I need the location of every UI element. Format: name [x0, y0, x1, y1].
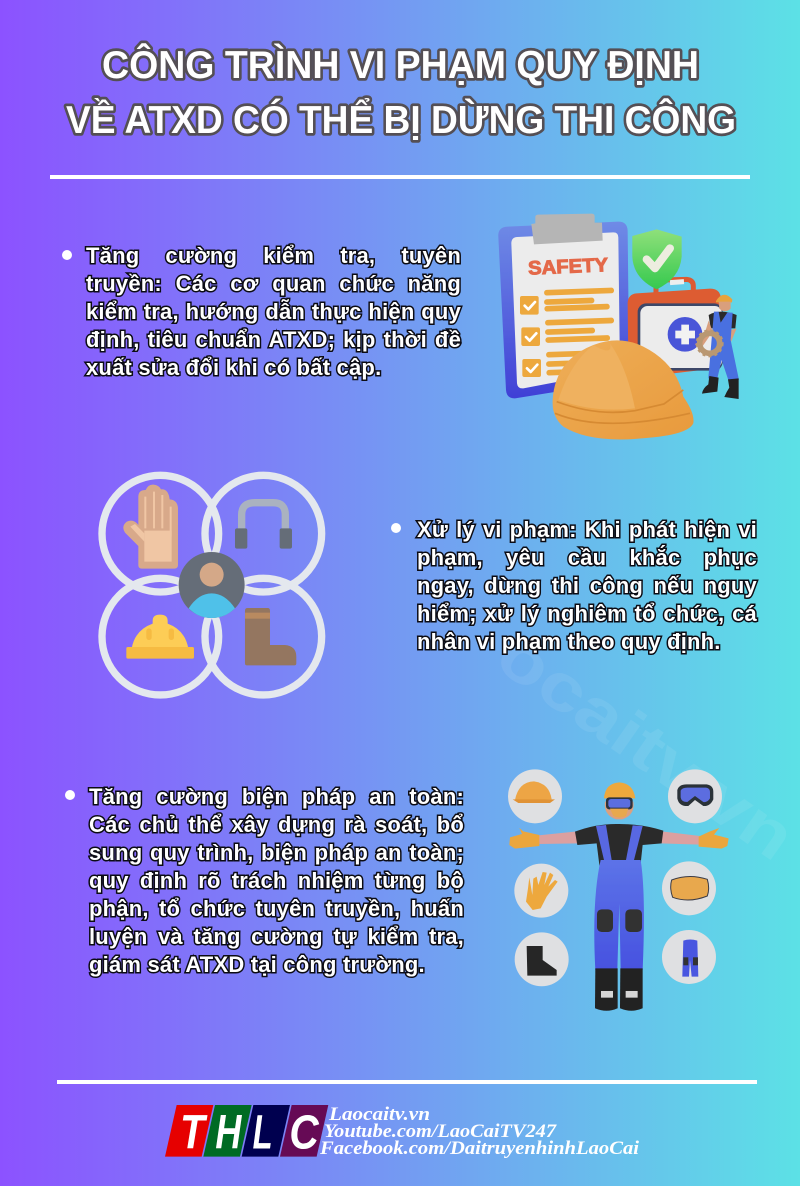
disc: mask — [671, 876, 709, 900]
icon: boot — [245, 608, 296, 665]
text block: xử lý vi phạm: ngay, dừng thi công nếu nguy — [417, 573, 757, 598]
disc: helmet — [513, 781, 555, 803]
title: CÔNG TRÌNH VI PHẠM QUY ĐỊNH — [102, 42, 699, 87]
disc: goggles — [677, 784, 713, 806]
text block: tăng cường biện pháp an toàn: quy định rõ trách nhiệm từng bộ — [89, 868, 464, 893]
footer links: Laocaitv.vn — [328, 1104, 430, 1125]
icon: person — [179, 552, 245, 618]
text block: xử lý vi phạm — [391, 517, 759, 655]
text block: xử lý vi phạm: hiểm; xử lý nghiêm tổ chức, cá — [417, 601, 757, 626]
text block: xử lý vi phạm: phạm, yêu cầu khắc phục — [417, 545, 757, 570]
footer links: Youtube.com/LaoCaiTV247 — [324, 1121, 558, 1142]
title — [64, 40, 736, 143]
text block: tăng cường kiểm tra — [62, 243, 463, 381]
illustration: safety clipboard, helmet and first-aid kit — [498, 214, 739, 440]
overalls — [594, 825, 644, 970]
logo tile T: T — [180, 1106, 208, 1160]
logo tile H: H — [215, 1106, 242, 1160]
text block: tăng cường biện pháp an toàn: luyện và tăng cường tự kiểm tra, — [89, 924, 464, 949]
logo tile C: C — [289, 1106, 320, 1160]
text block: tăng cường biện pháp an toàn: phận, tổ chức tuyên truyền, huấn — [89, 896, 464, 921]
text block: tăng cường kiểm tra: xuất sửa đổi khi có bất cập. — [86, 355, 381, 380]
head — [604, 782, 635, 819]
text block: tăng cường kiểm tra: định, tiêu chuẩn ATXD; kịp thời đề — [86, 327, 461, 352]
torso — [575, 824, 663, 870]
hard hat — [553, 340, 694, 439]
icon: yellow hard hat — [126, 615, 194, 659]
text block: tăng cường biện pháp an toàn: Tăng cường biện pháp an toàn: — [89, 784, 464, 809]
first-aid kit — [628, 279, 723, 373]
text block: xử lý vi phạm: Xử lý vi phạm: Khi phát hiện vi — [417, 517, 757, 542]
disc: boot — [527, 946, 557, 976]
footer links: Facebook.com/DaitruyenhinhLaoCai — [319, 1138, 640, 1159]
watermark: ocaitv.vn — [484, 616, 800, 874]
arms — [509, 828, 729, 849]
equipment discs — [508, 769, 722, 986]
title: VỀ ATXD CÓ THỂ BỊ DỪNG THI CÔNG — [66, 97, 736, 142]
icon: glove — [123, 485, 178, 569]
logo tile L — [242, 1105, 290, 1160]
text block: tăng cường biện pháp an toàn: sung quy trình, biện pháp an toàn; — [89, 840, 464, 865]
worker — [695, 295, 739, 399]
logo tile L: L — [253, 1106, 273, 1160]
icon: ear defenders — [235, 503, 292, 549]
text block: tăng cường kiểm tra: truyền: Các cơ quan chức năng — [86, 271, 461, 296]
text block: tăng cường kiểm tra: Tăng cường kiểm tra, tuyên — [86, 243, 461, 268]
text block: tăng cường biện pháp an toàn: Các chủ thể xây dựng rà soát, bổ — [89, 812, 464, 837]
rings — [102, 475, 322, 695]
text block: tăng cường kiểm tra: kiểm tra, hướng dẫn thực hiện quy — [86, 299, 461, 324]
text block: tăng cường biện pháp an toàn — [65, 784, 464, 978]
text block: tăng cường biện pháp an toàn: giám sát ATXD tại công trường. — [89, 952, 425, 977]
logo tile T — [165, 1105, 213, 1160]
clipboard: SAFETY — [528, 255, 609, 280]
clipboard — [498, 214, 629, 398]
disc: glove — [526, 872, 558, 910]
shield — [632, 229, 682, 289]
boots — [595, 968, 643, 1011]
text block: xử lý vi phạm: nhân vi phạm theo quy định. — [417, 629, 721, 654]
disc: trousers — [682, 939, 698, 977]
illustration: four PPE circles — [98, 472, 326, 699]
